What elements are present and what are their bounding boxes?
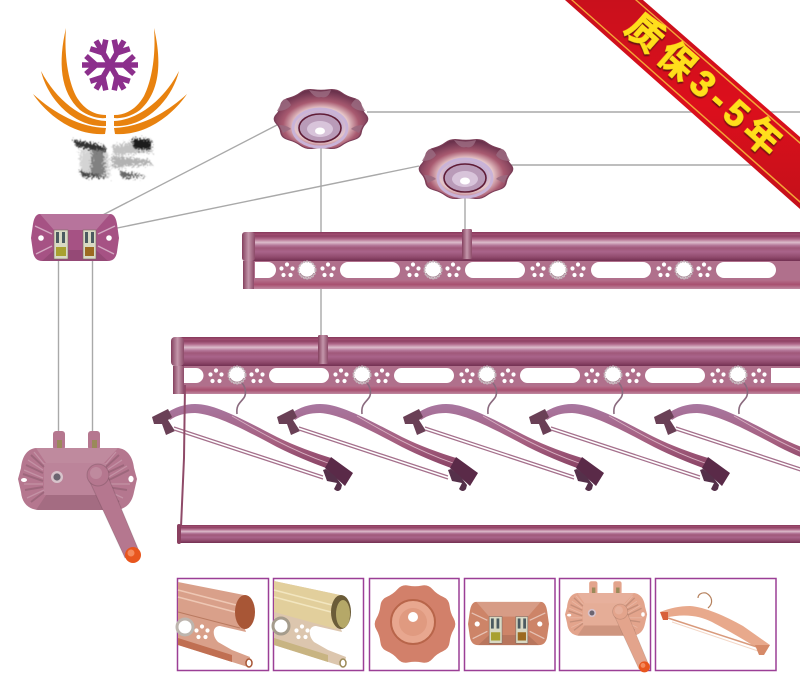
warranty ribbon	[565, 0, 800, 209]
icon: right wing	[114, 28, 187, 134]
thumbnail: hanger	[656, 578, 776, 670]
hanger 5	[654, 383, 800, 491]
pulley plate	[31, 214, 119, 261]
ceiling pulley disc 1	[274, 89, 368, 149]
hanger 1	[152, 383, 353, 491]
rail clip	[318, 335, 328, 364]
logo	[33, 26, 187, 179]
hanger 3	[403, 383, 604, 491]
hanger 4	[529, 383, 730, 491]
lift strap	[181, 385, 185, 527]
hanger 2	[277, 383, 478, 491]
thumbnail: hand crank	[560, 578, 650, 672]
hand crank winder	[18, 431, 141, 563]
upper rail	[242, 229, 800, 289]
lower rail	[171, 335, 800, 394]
icon: snowflake	[71, 26, 149, 104]
thumbnail: rail gold	[273, 578, 364, 670]
blurred logo wordmark	[74, 139, 152, 179]
ceiling pulley disc 2	[419, 139, 513, 199]
bottom bar	[177, 524, 800, 544]
thumbnail: rail rose	[177, 578, 268, 670]
thumbnail: pulley plate	[464, 578, 555, 670]
warranty text: 质保3-5年	[618, 5, 794, 168]
cables	[58, 112, 800, 432]
rail clip	[462, 229, 472, 259]
thumbnail: ceiling disc	[370, 578, 459, 670]
icon: left wing	[33, 28, 106, 134]
